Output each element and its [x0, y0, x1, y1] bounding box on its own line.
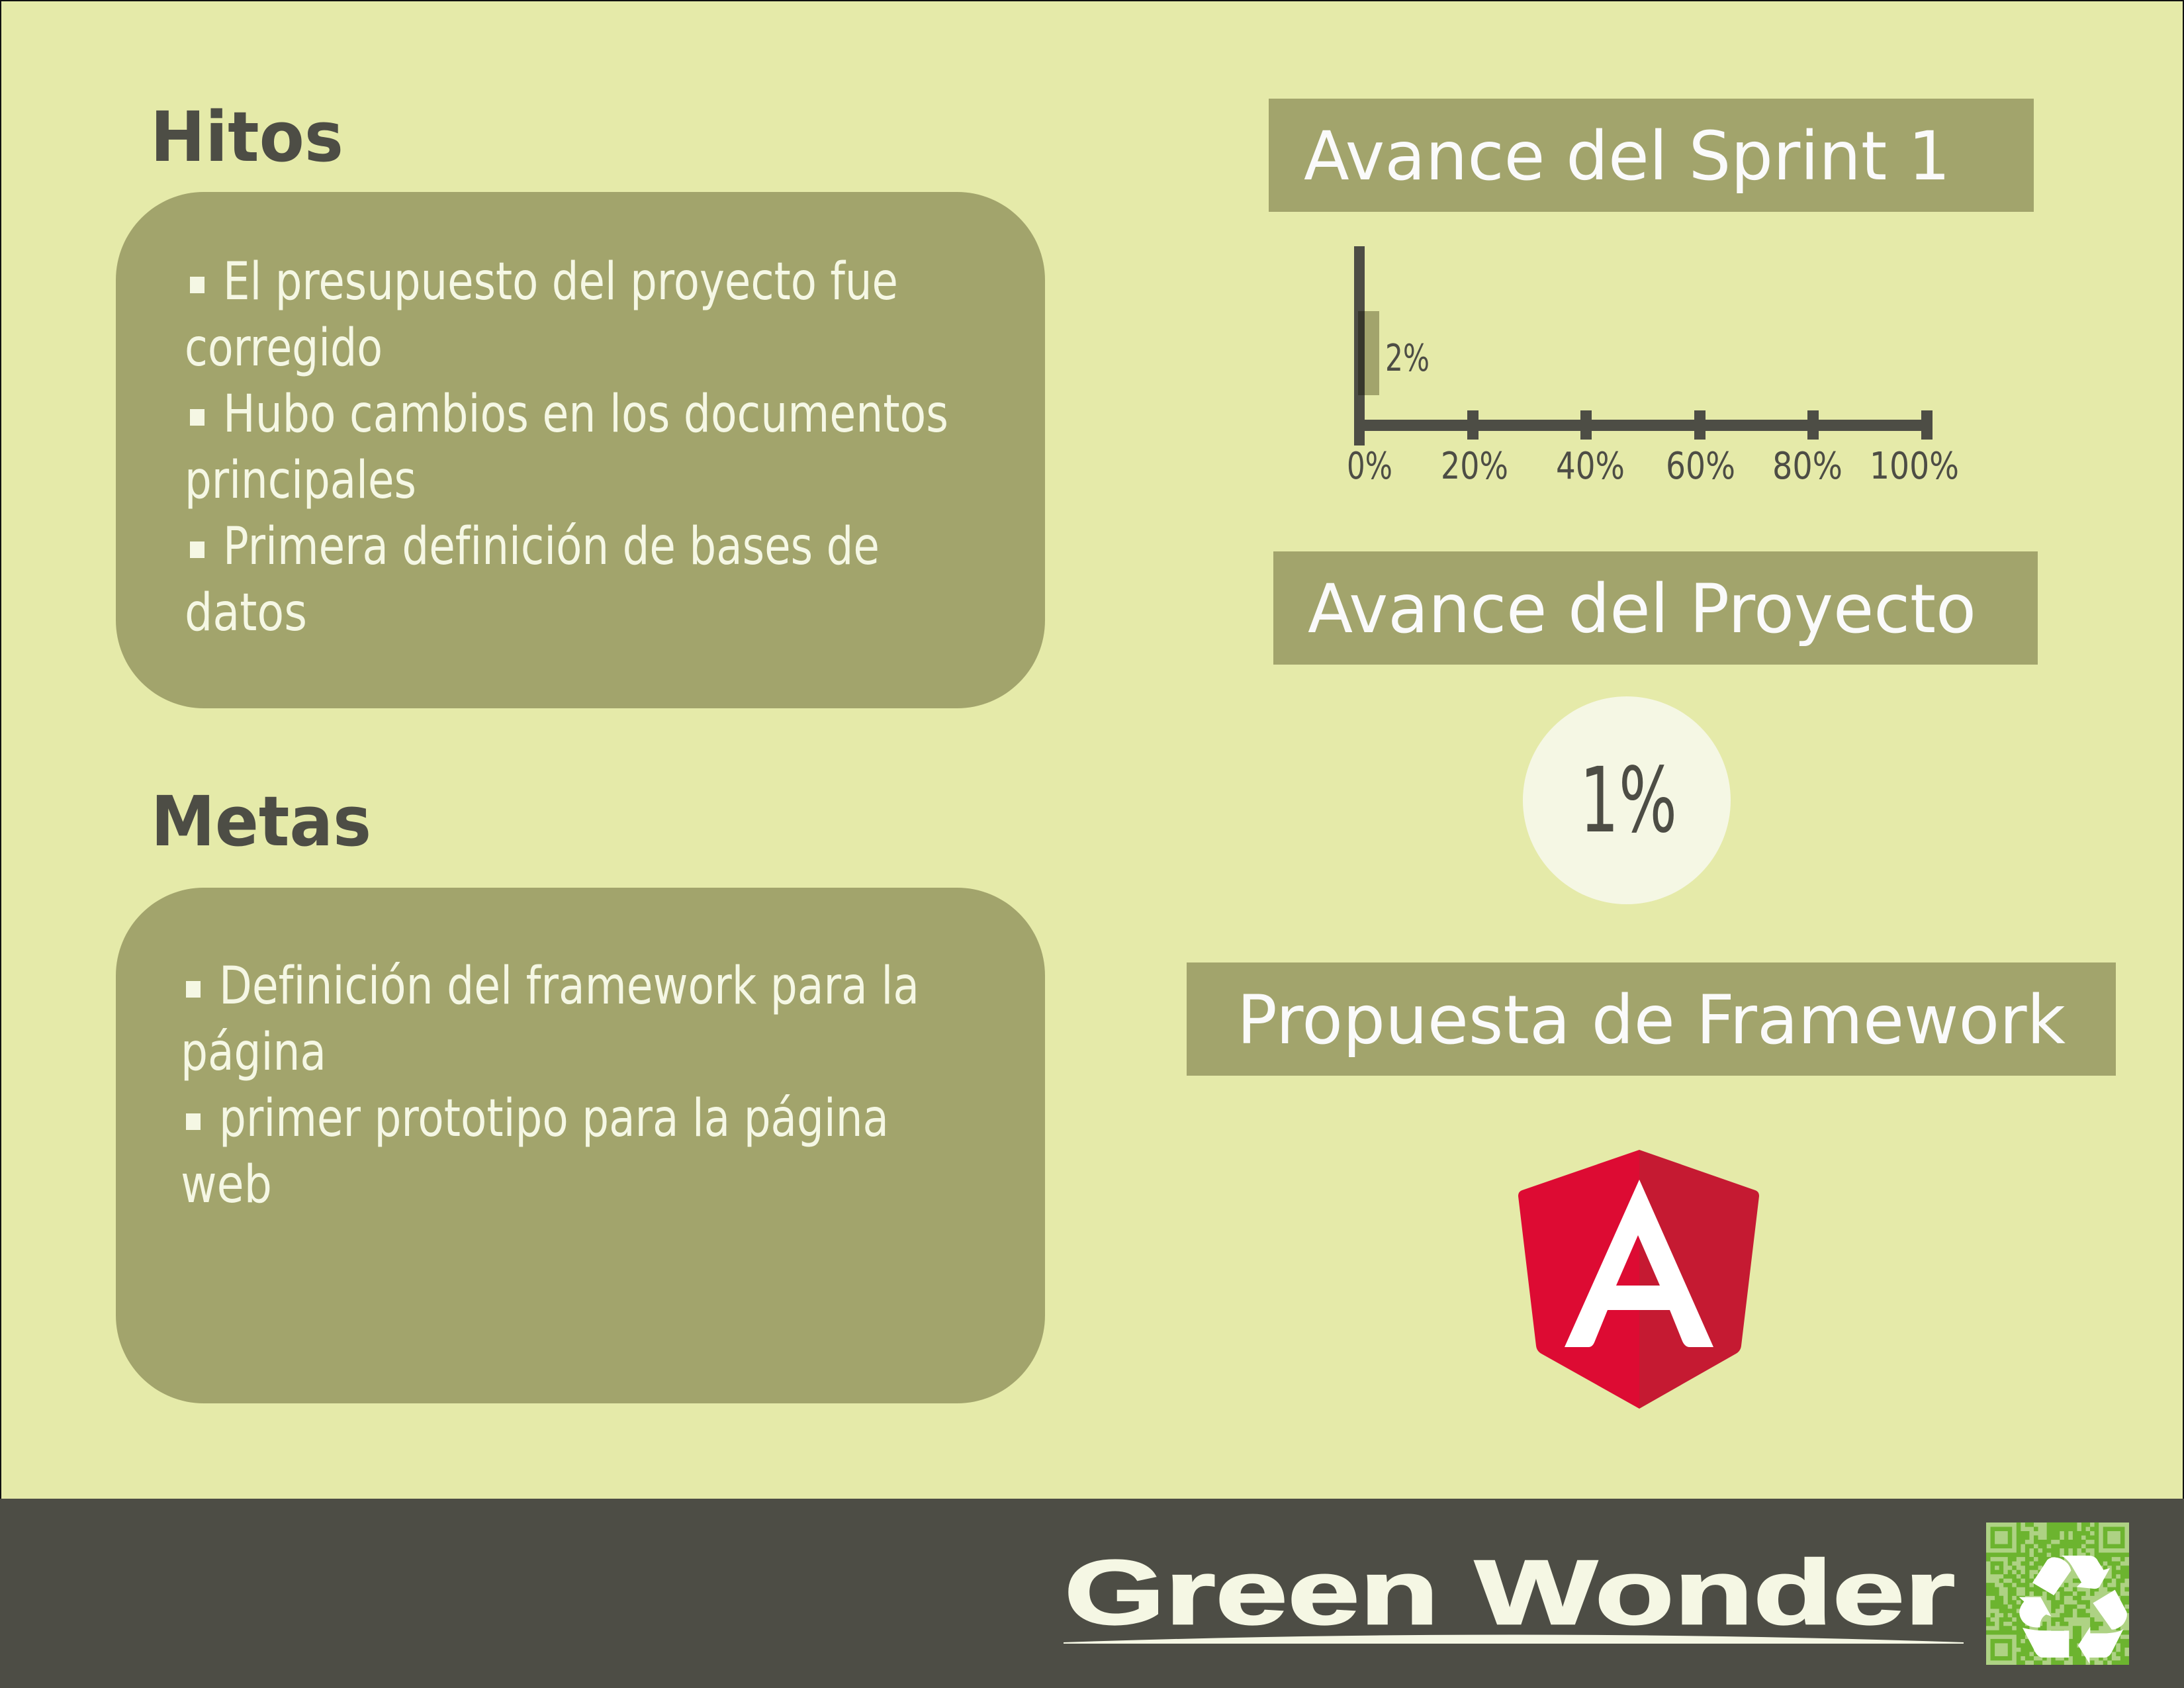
heading banner: Avance del Proyecto: Avance del Proyecto [1308, 570, 1976, 649]
bullet list: Metas: Definición del framework para la [219, 957, 919, 1016]
axis labels: 80% [1772, 445, 1843, 488]
axis labels: 100% [1870, 445, 1959, 488]
QR modules [1986, 1524, 2129, 1663]
bar: 2 percent [1358, 311, 1379, 395]
bullet list: Hitos: corregido [185, 318, 383, 378]
heading banner: Avance del Sprint 1: Avance del Sprint 1 [1304, 117, 1950, 196]
brand name: Green Wonder: Green Wonder [1064, 1542, 1955, 1644]
icon: Angular logo [1518, 1150, 1759, 1409]
bullet list: Metas: web [181, 1155, 272, 1215]
brand underline swoosh [1064, 1635, 1964, 1644]
panel: Metas [116, 888, 1045, 1403]
axis labels [1347, 445, 1959, 488]
stat circle: 1 percent: 1% [1580, 749, 1677, 853]
bar chart: sprint progress [1347, 246, 1959, 488]
axis labels: 60% [1666, 445, 1735, 488]
bullet list: Hitos: principales [185, 451, 416, 510]
heading banner: Avance del Proyecto [1273, 551, 2038, 665]
icon: QR code with recycle symbol [1986, 1523, 2129, 1665]
bullet list: Hitos: Primera definición de bases de [223, 517, 880, 577]
heading banner: Avance del Sprint 1 [1269, 99, 2034, 212]
bullet list: Hitos: Hubo cambios en los documentos [223, 385, 948, 444]
bullet list: Hitos: datos [185, 583, 307, 643]
heading banner: Propuesta de Framework [1187, 962, 2116, 1076]
stat circle: 1 percent [1523, 696, 1731, 904]
footer band [0, 1499, 2184, 1688]
bar value label: 2% [1385, 337, 1430, 380]
heading banner: Propuesta de Framework: Propuesta de Framework [1237, 981, 2066, 1060]
bullet list: Hitos: El presupuesto del proyecto fue [223, 252, 898, 312]
bullet list: Metas: página [181, 1023, 326, 1082]
recycle arrows [2019, 1556, 2127, 1664]
heading: Metas: Metas [151, 781, 371, 862]
bullet list: Metas [181, 957, 919, 1215]
panel: Hitos [116, 192, 1045, 708]
bullet list: Hitos [185, 252, 948, 643]
axis labels: 0% [1347, 445, 1392, 488]
axis labels: 40% [1556, 445, 1625, 488]
bullet list: Metas: primer prototipo para la página [219, 1089, 889, 1149]
heading: Hitos: Hitos [150, 97, 343, 177]
axis labels: 20% [1441, 445, 1508, 488]
